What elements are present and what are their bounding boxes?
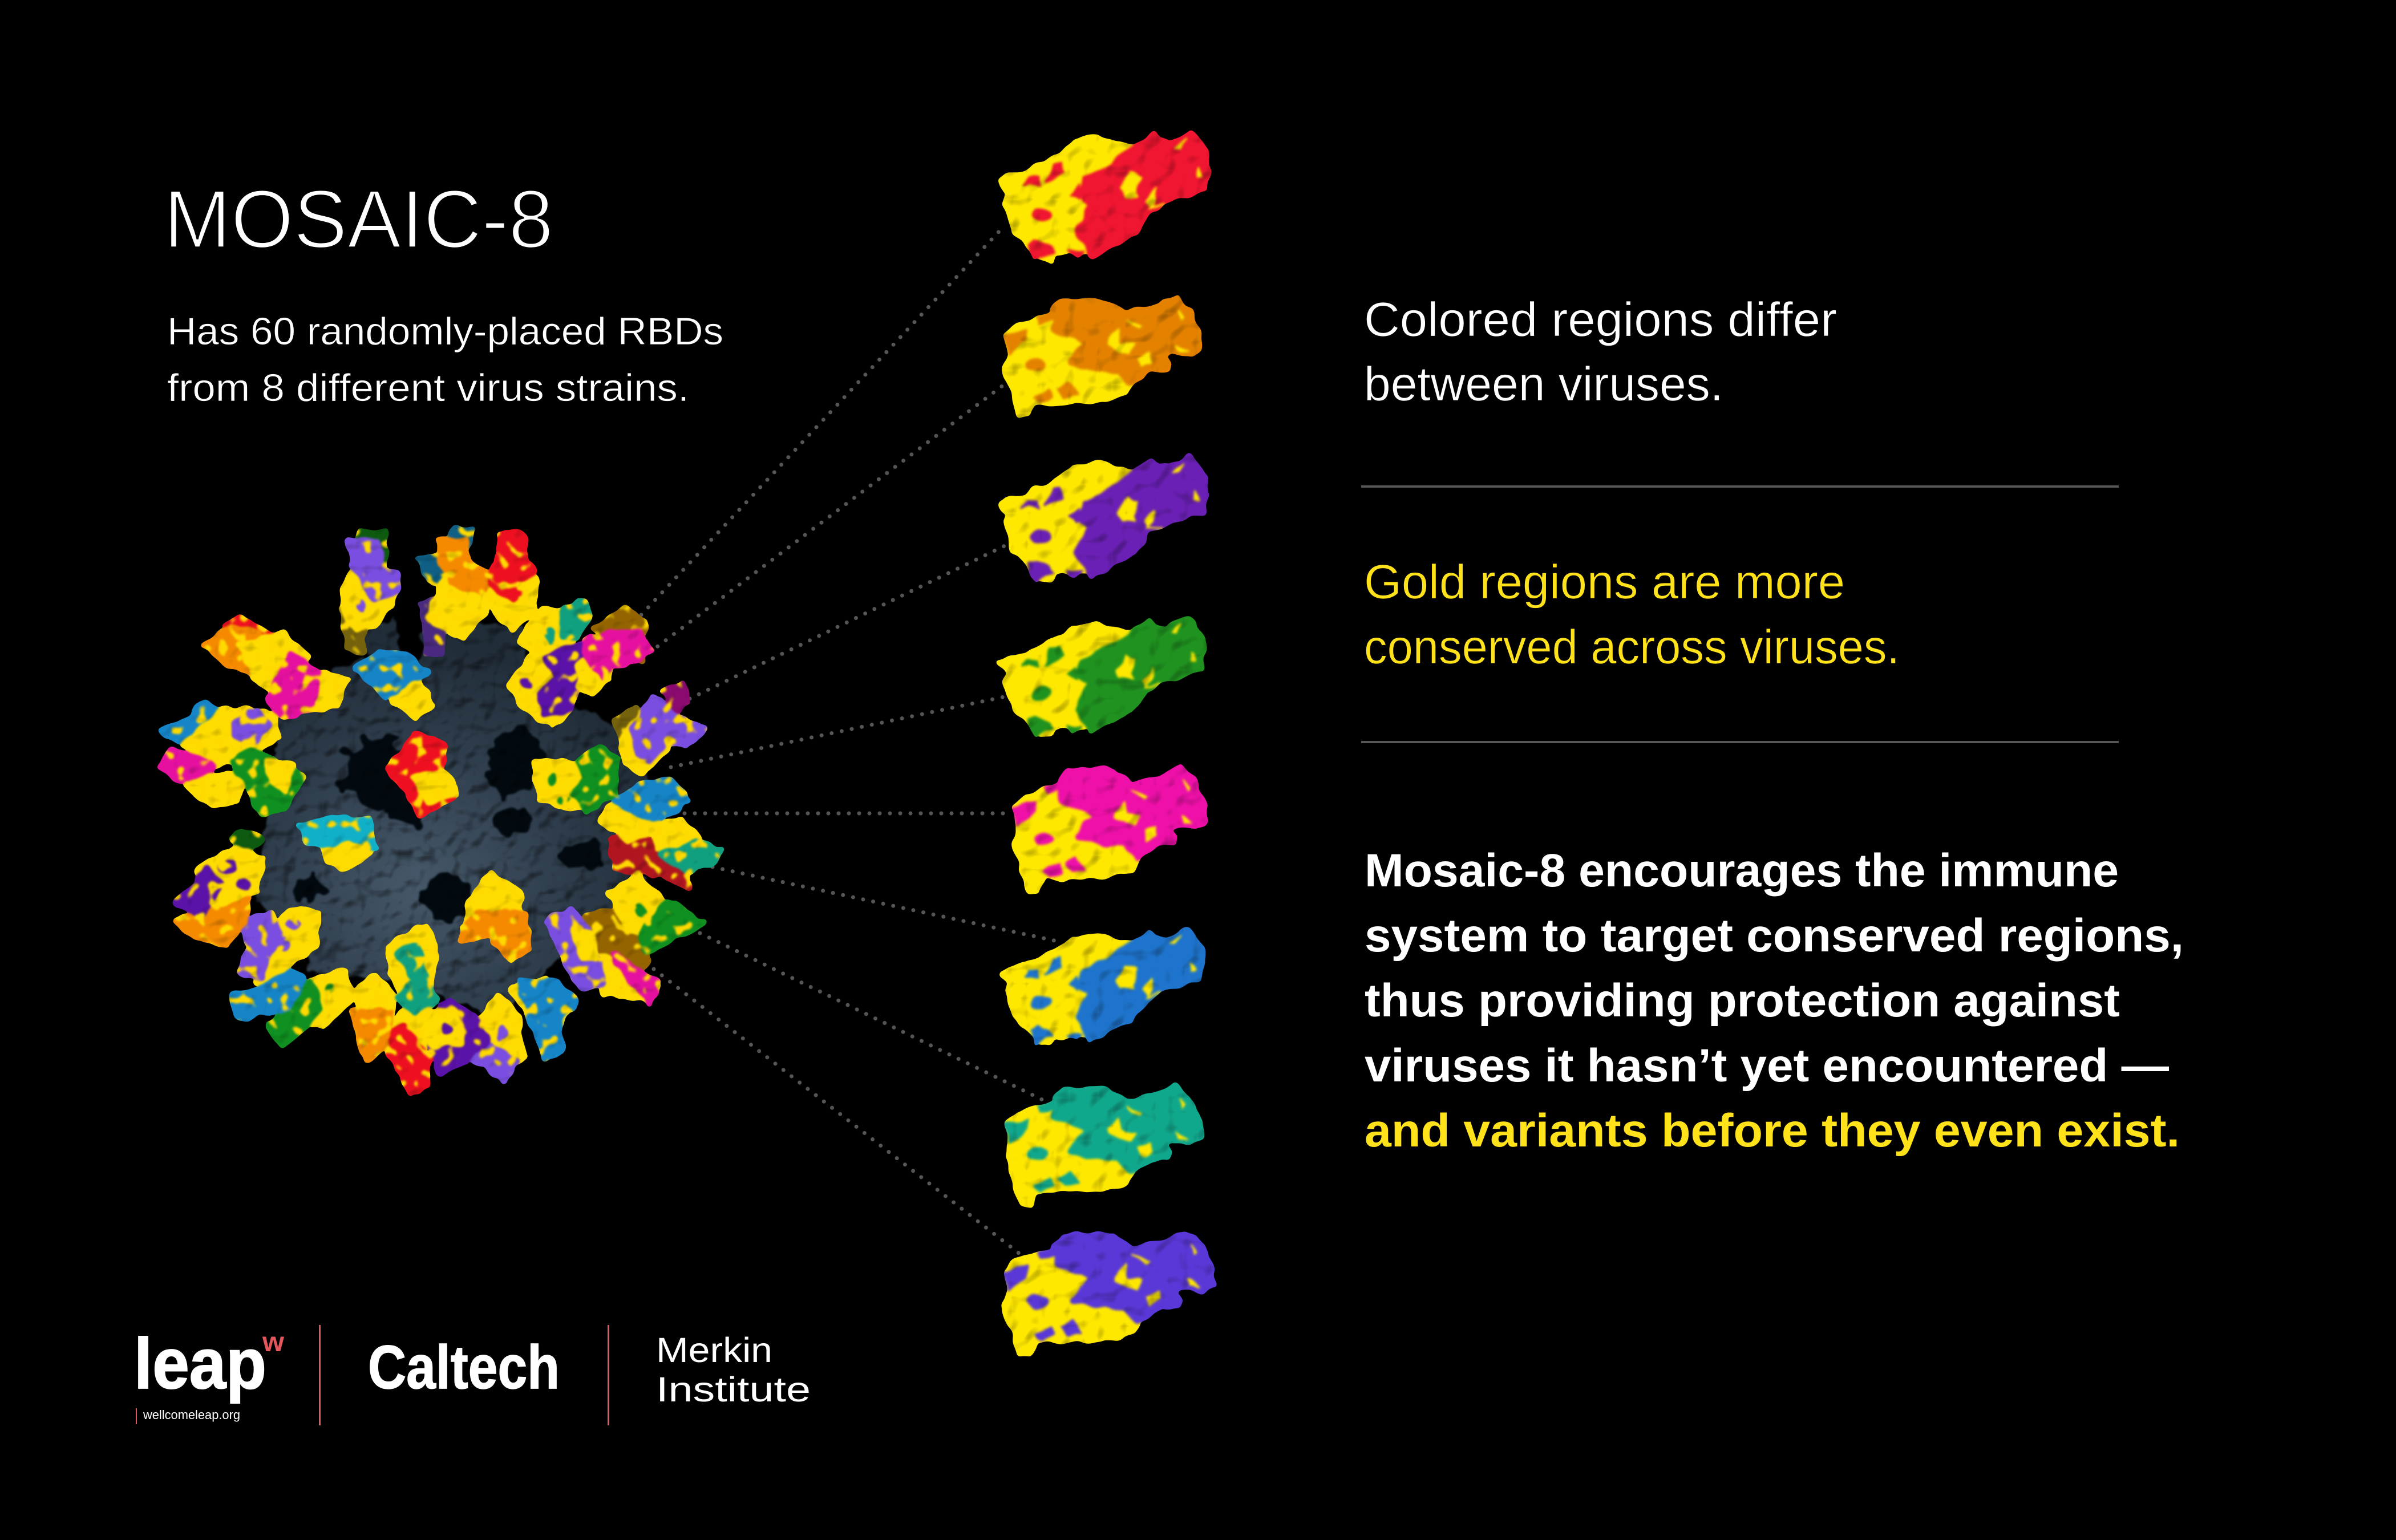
text block: colored regions: between viruses. — [1364, 357, 1723, 411]
text block: key message: thus providing protection against — [1365, 975, 2120, 1027]
RBD: red centre — [389, 734, 456, 814]
RBD: blue top centre — [358, 654, 431, 716]
RBD: blue and teal right — [601, 782, 720, 886]
text block: colored regions — [1364, 293, 1837, 411]
title: MOSAIC-8 — [164, 173, 553, 265]
logo: leap: wellcomeleap.org — [143, 1408, 240, 1422]
RBD: left cluster — [161, 704, 302, 814]
text block: subtitle: Has 60 randomly-placed RBDs — [167, 310, 723, 353]
nanoparticle core — [248, 617, 650, 1009]
text block: gold regions: conserved across viruses. — [1364, 620, 1900, 674]
RBD: red top — [492, 534, 534, 628]
RBD 8: violet — [1003, 1234, 1212, 1352]
RBD: purple bottom — [424, 1002, 486, 1072]
RBD: orange bottom left — [354, 976, 394, 1059]
RBD: orange top — [420, 530, 492, 652]
text block: subtitle — [167, 310, 723, 410]
RBD: magenta upper right back — [596, 610, 643, 660]
logo: Merkin Institute: Merkin — [656, 1331, 772, 1369]
logo: Merkin Institute: Institute — [656, 1370, 811, 1409]
dotted connector lines — [641, 231, 1054, 1259]
RBD: orange and magenta top left — [205, 620, 346, 716]
text block: subtitle: from 8 different virus strains. — [167, 366, 689, 410]
RBD: teal centre bottom — [391, 926, 435, 1010]
RBD: blue bottom right — [512, 980, 574, 1059]
logo: Merkin Institute — [656, 1331, 811, 1409]
text block: key message — [1365, 845, 2184, 1157]
RBD: violet bottom — [467, 996, 521, 1080]
text block: key message: system to target conserved regions, — [1365, 910, 2184, 962]
text block: key message: viruses it hasn’t yet encountered — — [1365, 1040, 2169, 1092]
RBD: violet top left — [343, 533, 398, 651]
RBD 7: teal — [1006, 1087, 1199, 1202]
text block: colored regions: Colored regions differ — [1364, 293, 1837, 346]
RBD: green lower right — [588, 876, 701, 966]
RBD: purple and orange left — [177, 832, 262, 945]
text block: key message: and variants before they even exist. — [1365, 1105, 2180, 1157]
RBD: green lower left — [270, 972, 352, 1044]
RBD: magenta upper right — [580, 632, 651, 692]
RBD: violet far right — [617, 686, 703, 772]
RBD 6: blue — [1002, 930, 1202, 1043]
RBD 5: magenta — [1014, 769, 1204, 889]
receptor-binding domains on the particle — [161, 530, 720, 1092]
RBD: teal upper right — [521, 602, 588, 656]
RBD: green centre right — [536, 748, 616, 810]
logo: leap: leap — [134, 1324, 266, 1404]
text block: gold regions — [1364, 555, 1900, 674]
RBD: cyan centre left — [301, 818, 375, 868]
RBD 4: green — [1001, 618, 1203, 735]
RBD: orange centre bottom — [462, 874, 528, 958]
RBD: violet and magenta lower right — [548, 910, 657, 1000]
RBD: blue and violet left — [232, 910, 318, 1016]
virus particle: Mosaic-8 nanoparticle — [161, 530, 720, 1092]
RBD 2: orange — [1005, 299, 1199, 414]
logo: leap: w — [262, 1327, 285, 1357]
logo: Caltech: Caltech — [368, 1332, 560, 1401]
RBD 3: purple — [1001, 458, 1205, 579]
RBD: purple upper right — [511, 646, 597, 724]
text block: key message: Mosaic-8 encourages the immune — [1365, 845, 2119, 897]
RBD: red bottom — [383, 1012, 427, 1092]
RBD 1: red — [1001, 132, 1208, 260]
text block: gold regions: Gold regions are more — [1364, 555, 1845, 609]
